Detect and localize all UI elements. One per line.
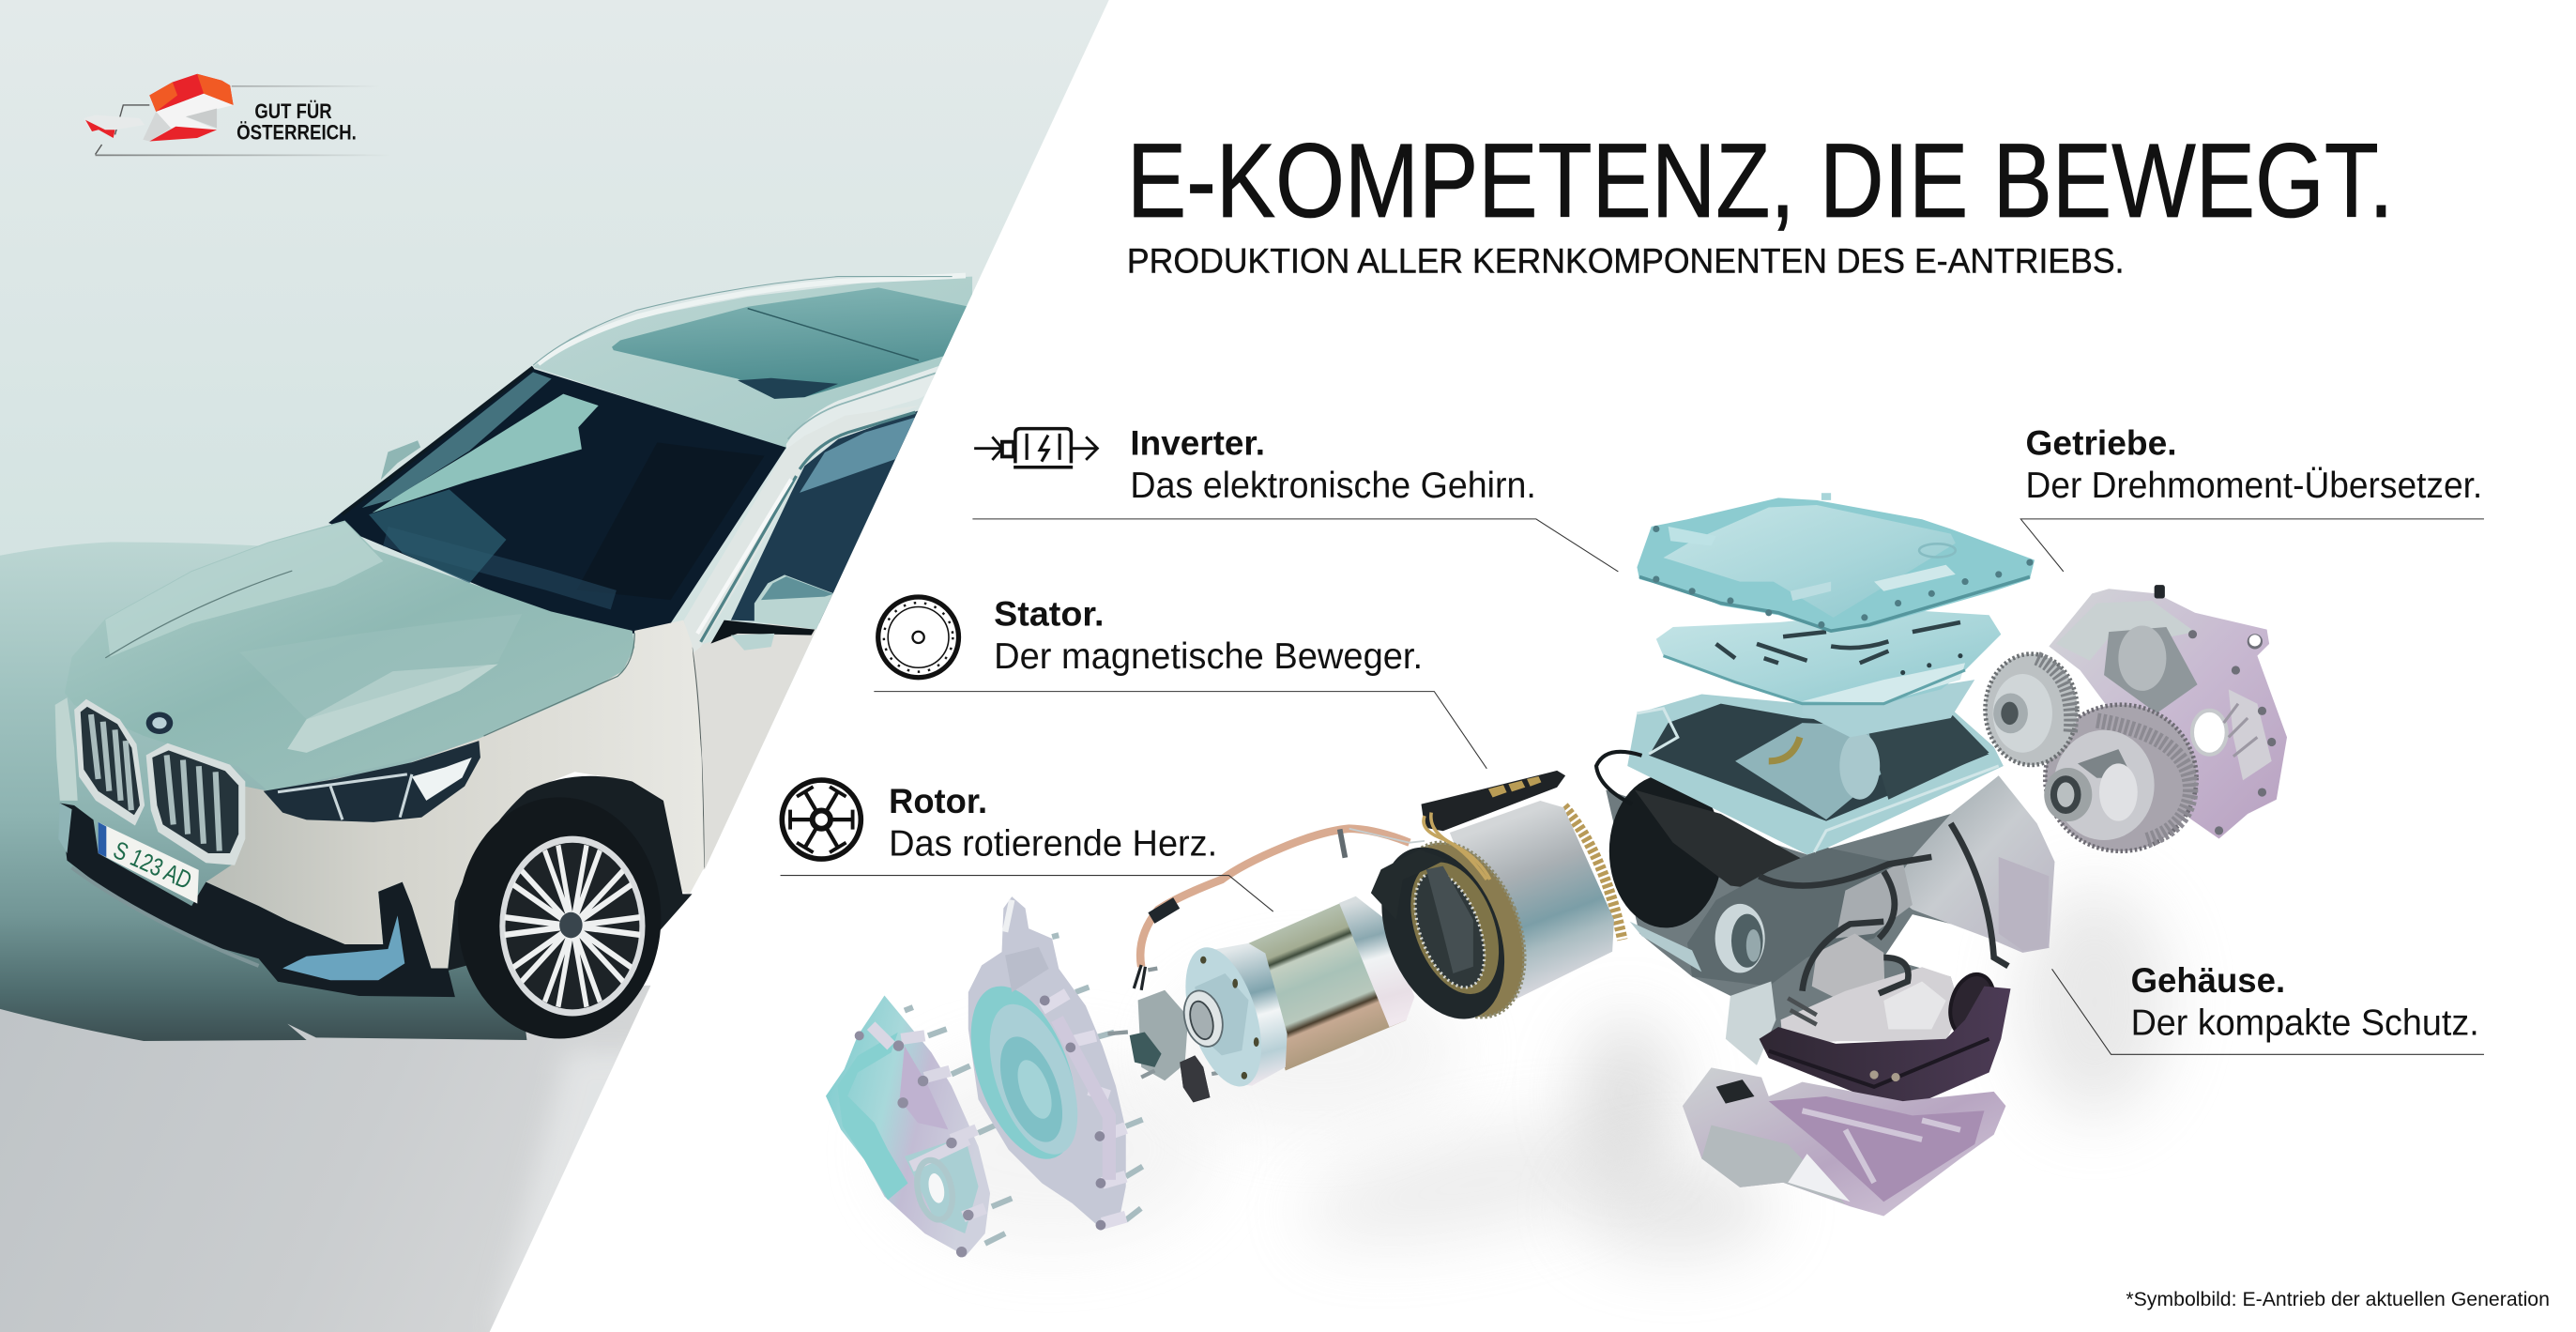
- callout: Gehäuse: [2052, 961, 2484, 1054]
- Austria map polygons: [84, 74, 234, 141]
- heading: Gehäuse.: [2131, 961, 2285, 1000]
- center block: [1687, 848, 1908, 987]
- icon: rotor: [782, 780, 861, 859]
- logo: Gut für Österreich: [84, 74, 391, 156]
- silver block and compressor: [1726, 934, 1960, 1065]
- photo: BMW iX1 in studio: [0, 0, 1150, 1332]
- leader line: [2052, 969, 2484, 1054]
- description: Der magnetische Beweger.: [994, 636, 1423, 677]
- studio wall: [0, 0, 1150, 690]
- motor: rotor and stator: [1107, 771, 1623, 1102]
- wheel: [458, 797, 661, 1038]
- windshield: [328, 369, 786, 634]
- windshield reflection: [373, 394, 599, 513]
- side window: [731, 410, 922, 623]
- stator black ring: [1358, 829, 1528, 1037]
- description: Das elektronische Gehirn.: [1130, 466, 1536, 506]
- large gear: [2045, 705, 2197, 851]
- dark purple cover: [1760, 987, 2011, 1106]
- roof: [533, 277, 972, 449]
- callout: Inverter: [972, 424, 1618, 572]
- kidney grille right: [146, 743, 245, 865]
- floor shadow: [0, 542, 526, 1041]
- logo: Gut für Österreich: ÖSTERREICH.: [236, 121, 357, 145]
- rotor cable: [1134, 829, 1410, 990]
- gearbox: [1985, 585, 2287, 851]
- front fender and bumper: [206, 620, 704, 968]
- left mirror: [381, 440, 420, 480]
- inverter support: [1802, 680, 1974, 737]
- inverter top lid: [1637, 493, 2035, 632]
- description: Das rotierende Herz.: [889, 824, 1217, 865]
- sunroof: [612, 287, 969, 399]
- stator body: [1450, 801, 1614, 1010]
- lower dark fascia: [60, 803, 455, 997]
- stator rear windings: [1563, 806, 1623, 940]
- callout: Rotor: [781, 780, 1273, 911]
- rotor front band: [1212, 943, 1288, 1086]
- number plate: [99, 822, 199, 904]
- rotor body: [1248, 896, 1410, 1071]
- floor reflection: [501, 1051, 619, 1306]
- bottom flange: [1630, 922, 1701, 972]
- stator windings: [1395, 850, 1516, 1006]
- footnote: *Symbolbild: E-Antrieb der aktuellen Generation: [2126, 1289, 2550, 1310]
- coolant port: [1715, 904, 1765, 972]
- leader line: [972, 519, 1618, 572]
- heading: Inverter.: [1130, 424, 1265, 463]
- leader line: [2020, 519, 2484, 572]
- blue accent: [282, 915, 404, 980]
- logo text: GUT FÜR: [254, 100, 332, 123]
- callout: Getriebe: [2020, 424, 2484, 572]
- heading: Stator.: [994, 595, 1104, 634]
- inverter middle plate: [1656, 610, 2001, 704]
- A pillar: [684, 440, 828, 652]
- subtitle: PRODUKTION ALLER KERNKOMPONENTEN DES E-ANTRIEBS.: [1127, 241, 2125, 280]
- icon: stator: [878, 597, 958, 678]
- BMW emblem: [146, 712, 173, 734]
- headlight: [264, 741, 480, 822]
- heading: Rotor.: [889, 782, 987, 820]
- rotor face and shaft: [1171, 939, 1276, 1102]
- oil pan: [1683, 1067, 2005, 1217]
- left corner panel: [55, 697, 78, 801]
- roof rail: [538, 276, 966, 363]
- front end plate: [950, 896, 1143, 1230]
- main housing, inverter, gearbox: [1596, 493, 2287, 1217]
- gearbox housing plate: [2049, 589, 2287, 839]
- description: Der kompakte Schutz.: [2131, 1003, 2479, 1043]
- right casing: [1888, 775, 2054, 953]
- stator teeth ring: [1375, 824, 1548, 1035]
- description: Der Drehmoment-Übersetzer.: [2026, 466, 2482, 506]
- side roof strips: [786, 366, 938, 449]
- rear end plate: [826, 996, 1012, 1257]
- logo frame lines: [96, 85, 391, 156]
- leader line: [874, 692, 1486, 769]
- hoses: [1760, 823, 2008, 993]
- rotor rear band: [1339, 896, 1414, 1027]
- hood: [77, 520, 634, 742]
- rotor connector: [1107, 969, 1222, 1102]
- stator cap: [1371, 850, 1446, 920]
- leader line: [781, 876, 1273, 911]
- wheel arch: [448, 776, 693, 971]
- grey studio floor: [0, 986, 651, 1332]
- fan: [1943, 970, 2001, 1041]
- bus bar: [1349, 771, 1565, 880]
- icon: inverter: [974, 429, 1097, 467]
- car upper part: [328, 276, 972, 653]
- small gear: [1985, 654, 2077, 765]
- dark motor face: [1609, 774, 1722, 927]
- motor end plates: [826, 896, 1143, 1257]
- number plate: S 123 AD: [109, 835, 196, 895]
- callout: Stator: [874, 595, 1486, 769]
- heading: Getriebe.: [2026, 424, 2177, 463]
- housing base filler: [1606, 789, 2049, 1041]
- door panel: [694, 623, 816, 869]
- floor shadows under drivetrain: [887, 887, 2169, 1268]
- kidney grille left: [74, 699, 145, 825]
- car front part: [55, 440, 704, 1038]
- housing top frame: [1627, 694, 2004, 854]
- right mirror: [755, 574, 833, 630]
